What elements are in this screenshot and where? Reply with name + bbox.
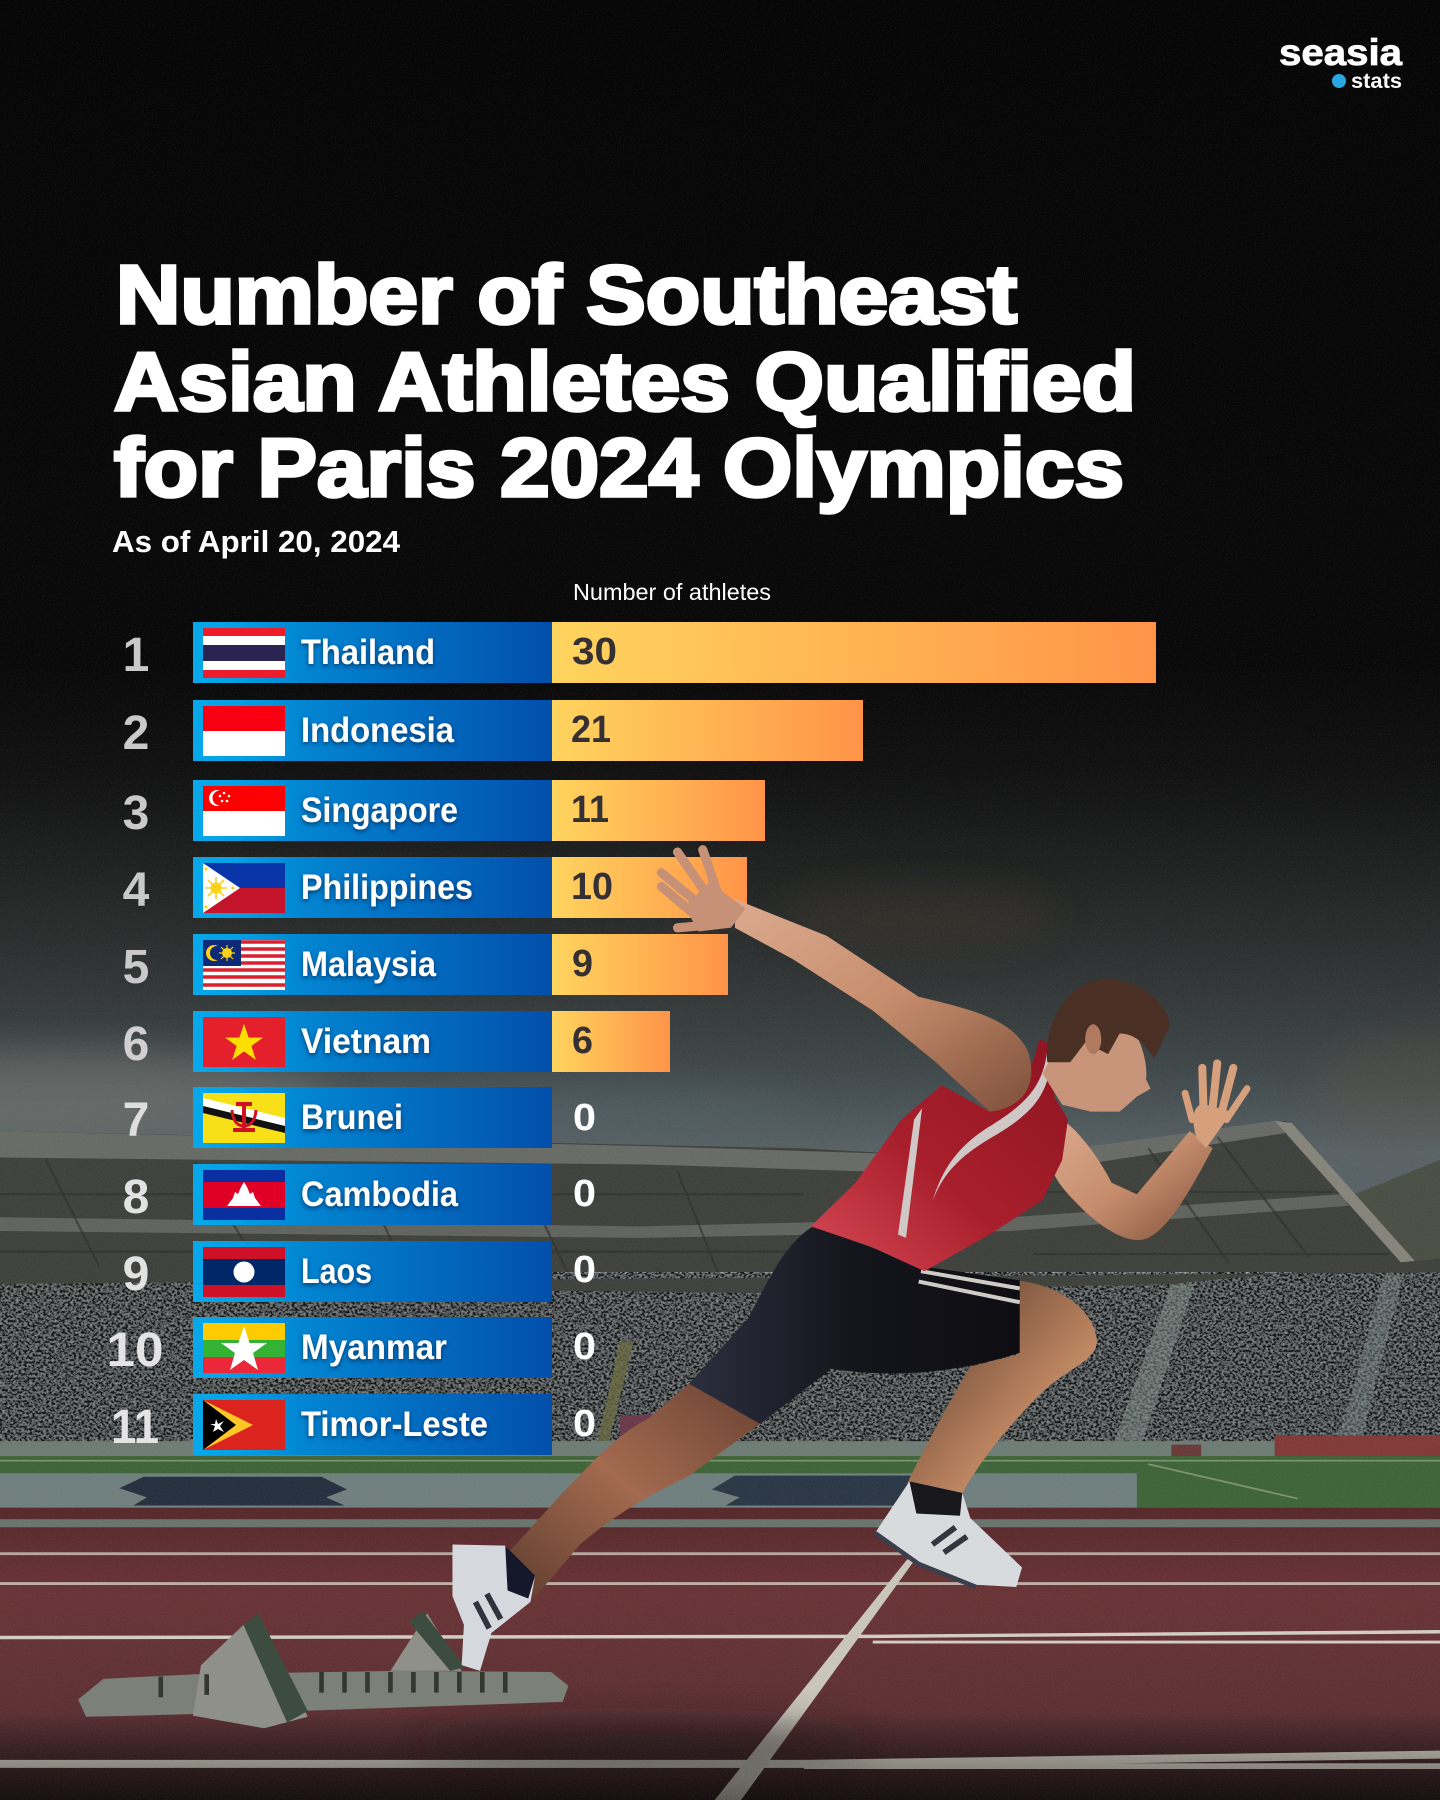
starting blocks <box>78 1611 568 1728</box>
row 7: Brunei: 0 <box>573 1097 596 1139</box>
row 6: Vietnam <box>123 1011 670 1072</box>
row 3: Singapore: 11 <box>571 789 609 831</box>
row 2: Indonesia: 2 <box>123 707 149 760</box>
row 11: Timor-Leste: 11 <box>111 1401 159 1454</box>
subtitle: As of April 20, 2024 <box>112 524 401 559</box>
row 6: Vietnam: 6 <box>123 1018 149 1071</box>
row 4: Philippines: 4 <box>123 864 150 917</box>
ranked bar chart <box>106 622 1156 1455</box>
row 8: Cambodia: Cambodia <box>301 1175 458 1214</box>
row 7: Brunei: 7 <box>123 1094 149 1147</box>
rear hand <box>1185 1063 1247 1143</box>
row 3: Singapore <box>123 780 765 841</box>
row 3: Singapore: 3 <box>123 787 149 840</box>
row 9: Laos: 0 <box>573 1249 596 1291</box>
front leg <box>907 1280 1097 1493</box>
row 10: Myanmar <box>106 1317 596 1378</box>
shorts <box>689 1226 1020 1424</box>
row 6: Vietnam: 6 <box>572 1020 593 1062</box>
sprinter and starting blocks <box>78 850 1247 1728</box>
row 4: Philippines <box>123 857 747 918</box>
row 10: Myanmar: Myanmar <box>301 1328 447 1367</box>
row 5: Malaysia: 5 <box>123 941 149 994</box>
row 2: Indonesia <box>123 700 863 761</box>
title: Number of Southeast <box>116 248 1017 341</box>
row 5: Malaysia <box>123 934 728 995</box>
axis label: Number of athletes <box>573 579 771 605</box>
row 1: Thailand: 1 <box>123 629 149 682</box>
row 10: Myanmar: 0 <box>573 1326 596 1368</box>
row 4: Philippines: 10 <box>571 866 613 908</box>
row 8: Cambodia: 0 <box>573 1173 596 1215</box>
row 11: Timor-Leste: 0 <box>573 1403 596 1445</box>
rear arm <box>1050 1120 1213 1240</box>
head and hair <box>1043 978 1169 1112</box>
logo: seasia stats: stats <box>1351 70 1402 93</box>
row 8: Cambodia: 8 <box>123 1171 149 1224</box>
row 3: Singapore: Singapore <box>301 791 458 830</box>
row 5: Malaysia: Malaysia <box>301 945 436 984</box>
row 10: Myanmar: 10 <box>106 1324 164 1377</box>
row 9: Laos <box>123 1241 596 1302</box>
row 7: Brunei <box>123 1087 596 1148</box>
lead arm and hand <box>661 850 1031 1112</box>
front shoe <box>875 1481 1022 1587</box>
running track <box>0 1508 1440 1800</box>
row 9: Laos: 9 <box>123 1248 149 1301</box>
rear leg <box>505 1384 760 1598</box>
row 1: Thailand <box>123 622 1156 683</box>
row 4: Philippines: Philippines <box>301 868 473 907</box>
rear shoe <box>452 1545 535 1671</box>
shirt <box>811 1039 1068 1271</box>
title <box>114 248 1136 514</box>
title: Asian Athletes Qualified <box>114 335 1136 428</box>
row 2: Indonesia: 21 <box>571 709 611 751</box>
logo: seasia stats <box>1279 32 1402 93</box>
row 6: Vietnam: Vietnam <box>301 1022 431 1061</box>
title: for Paris 2024 Olympics <box>114 421 1124 514</box>
row 5: Malaysia: 9 <box>572 943 593 985</box>
row 11: Timor-Leste <box>111 1394 596 1455</box>
row 8: Cambodia <box>123 1164 596 1225</box>
row 1: Thailand: Thailand <box>301 633 435 672</box>
field and wall <box>0 1412 1440 1509</box>
stadium roof <box>0 1121 1440 1309</box>
logo: seasia stats: seasia <box>1279 32 1402 73</box>
row 11: Timor-Leste: Timor-Leste <box>301 1405 488 1444</box>
row 9: Laos: Laos <box>301 1252 372 1291</box>
row 2: Indonesia: Indonesia <box>301 711 454 750</box>
crowd <box>0 1259 1440 1442</box>
row 7: Brunei: Brunei <box>301 1098 403 1137</box>
row 1: Thailand: 30 <box>572 631 617 673</box>
